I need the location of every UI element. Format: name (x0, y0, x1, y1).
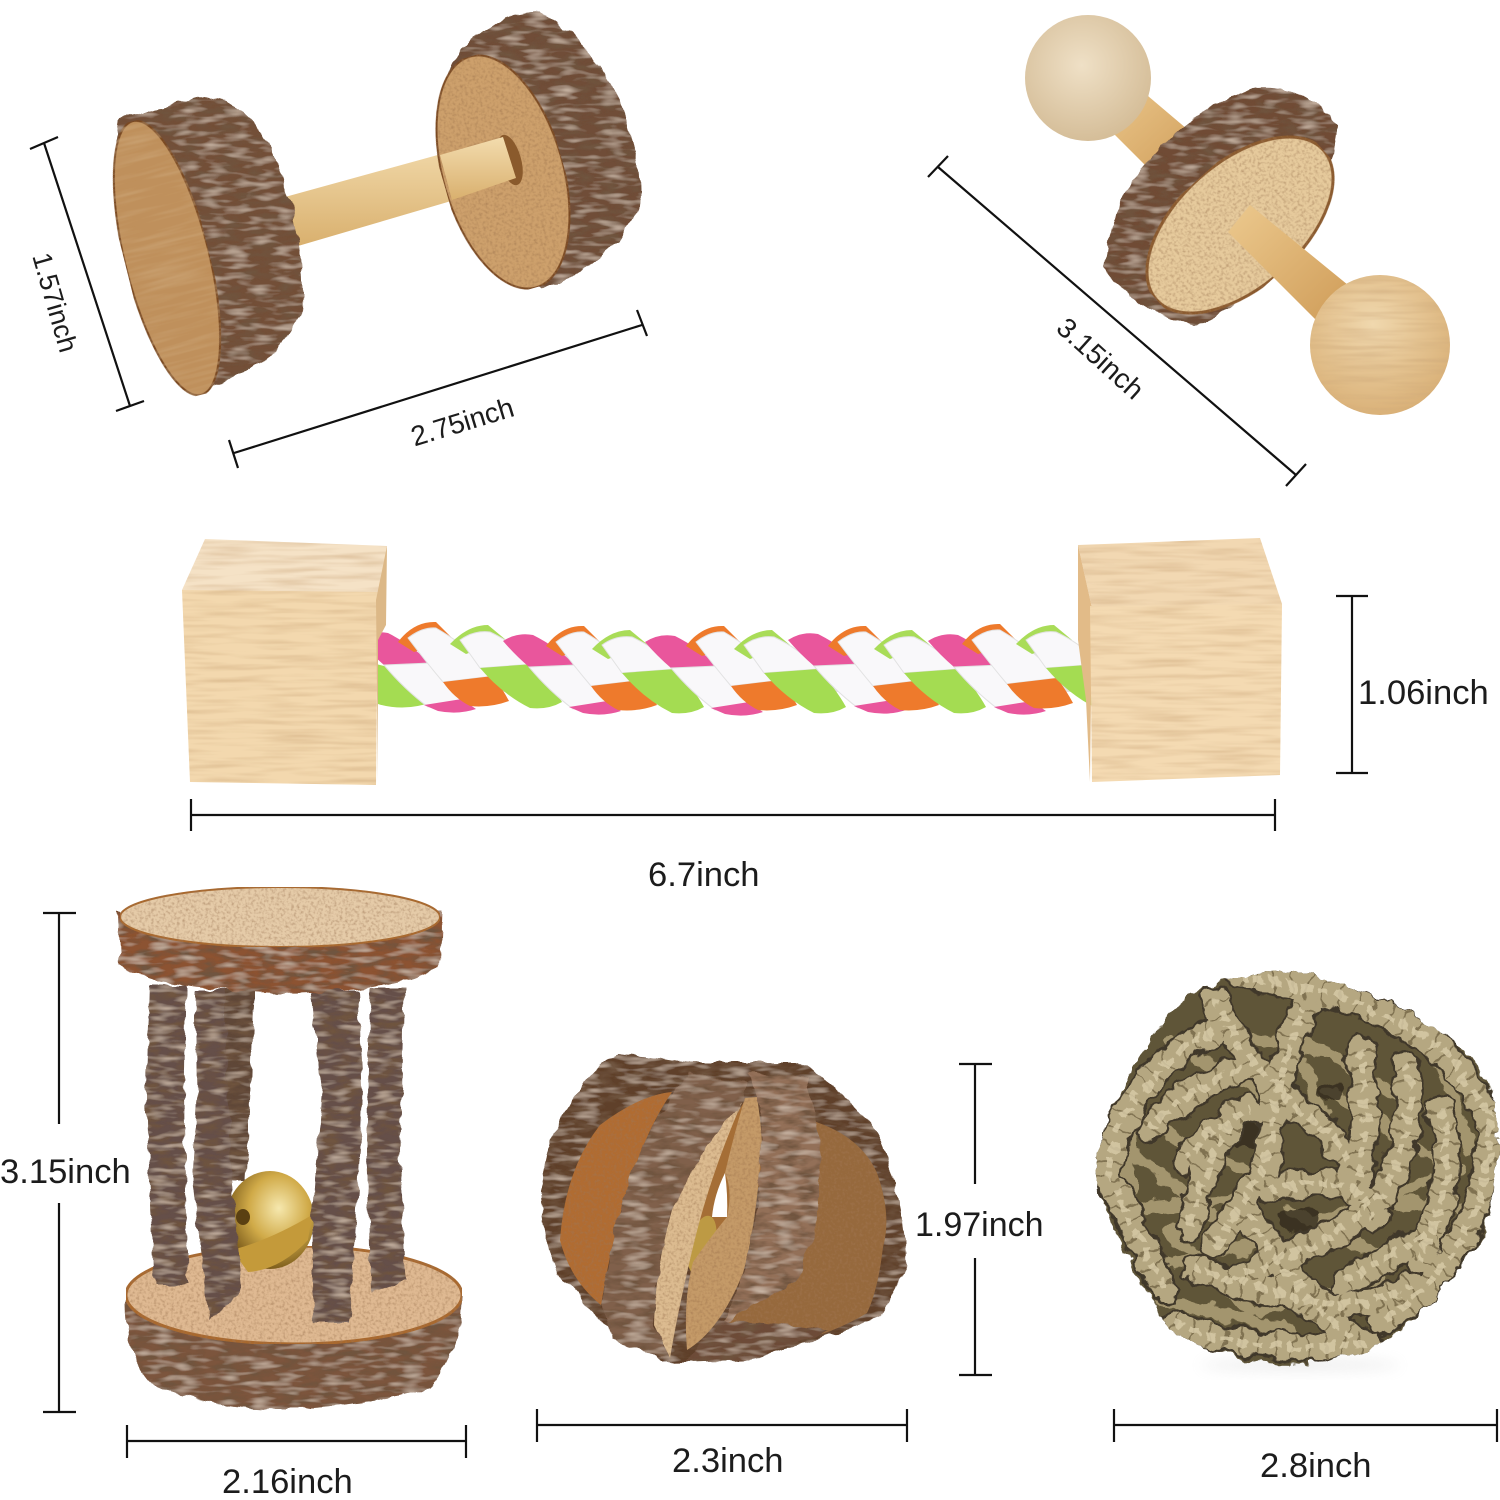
left face (560, 1092, 672, 1305)
left bark slice (602, 1073, 747, 1360)
white slit (712, 1173, 727, 1217)
dimension: 1.57inch: 1.57inch (26, 249, 83, 356)
toy: bark disc dumbbell (92, 12, 640, 405)
dimension: 2.75inch (229, 310, 647, 468)
dimension: 1.06inch: 1.06inch (1358, 674, 1489, 712)
dimension: 2.8inch (1114, 1409, 1497, 1485)
rope core (425, 650, 1080, 692)
bottom disc face (126, 1246, 462, 1344)
ball base (1090, 970, 1500, 1370)
dimension: 6.7inch: 6.7inch (648, 856, 760, 894)
bottom disc rim (126, 1296, 462, 1409)
rod through disc (1228, 205, 1348, 322)
toy: bark sphere (540, 1053, 907, 1362)
left disc face (92, 111, 242, 405)
toy: wood blocks with rope (182, 538, 1282, 785)
braid highlights (1108, 977, 1490, 1347)
rope strands (358, 622, 1128, 716)
right bark slice (723, 1073, 820, 1325)
left block (182, 539, 387, 600)
sticks (146, 985, 406, 1322)
rope end strand (376, 664, 432, 708)
rod (285, 137, 516, 246)
rod hole (492, 132, 528, 188)
right face (720, 1120, 886, 1340)
top ball (1025, 15, 1151, 141)
dimension: 1.06inch (1336, 596, 1489, 773)
small bell (682, 1213, 722, 1277)
dimension: 2.16inch (127, 1425, 466, 1500)
braid twists (1108, 977, 1490, 1347)
disc bark (1105, 87, 1338, 326)
dimension: 3.15inch diagonal (928, 156, 1306, 486)
dark gaps (1227, 1080, 1342, 1234)
dimension: 3.15inch vertical (0, 913, 131, 1412)
light inner face (654, 1100, 743, 1358)
toy: woven grass ball (1090, 970, 1500, 1370)
dimension: 2.3inch (537, 1409, 907, 1480)
dimension: 2.8inch: 2.8inch (1260, 1447, 1372, 1485)
dimension: 6.7inch (191, 799, 1275, 894)
dimension: 2.75inch: 2.75inch (407, 392, 518, 452)
bell (226, 1171, 314, 1272)
right disc face (412, 40, 594, 304)
shadow: grass ball (1200, 1360, 1400, 1370)
bottom ball (1310, 275, 1450, 415)
rod top (1098, 85, 1200, 180)
toy: roller with bell (118, 887, 462, 1409)
dimension: 3.15inch vertical: 3.15inch (0, 1153, 131, 1191)
braid outlines (1108, 977, 1490, 1347)
braid bodies (1108, 977, 1490, 1347)
disc face (1115, 104, 1365, 346)
dimension: 2.3inch: 2.3inch (672, 1442, 784, 1480)
filler strands (1120, 1030, 1470, 1330)
back stick (225, 990, 254, 1180)
dimension: 3.15inch diagonal: 3.15inch (1051, 311, 1150, 405)
toy: ball dumbbell (1025, 15, 1450, 415)
top disc rim (118, 912, 442, 993)
dimension: 1.97inch (915, 1064, 1044, 1375)
top disc face (120, 887, 440, 947)
outer sphere (540, 1053, 907, 1362)
right block (1078, 538, 1282, 608)
dimension: 2.16inch: 2.16inch (222, 1463, 353, 1500)
inner tan face (686, 1097, 762, 1350)
dimension: 1.57inch (26, 137, 144, 411)
left disc bark (117, 96, 303, 396)
gap behind slices (690, 1100, 762, 1280)
lower bark strip (685, 1322, 830, 1360)
dimension: 1.97inch: 1.97inch (915, 1206, 1044, 1244)
right disc bark (441, 12, 640, 290)
rod end (440, 137, 516, 200)
